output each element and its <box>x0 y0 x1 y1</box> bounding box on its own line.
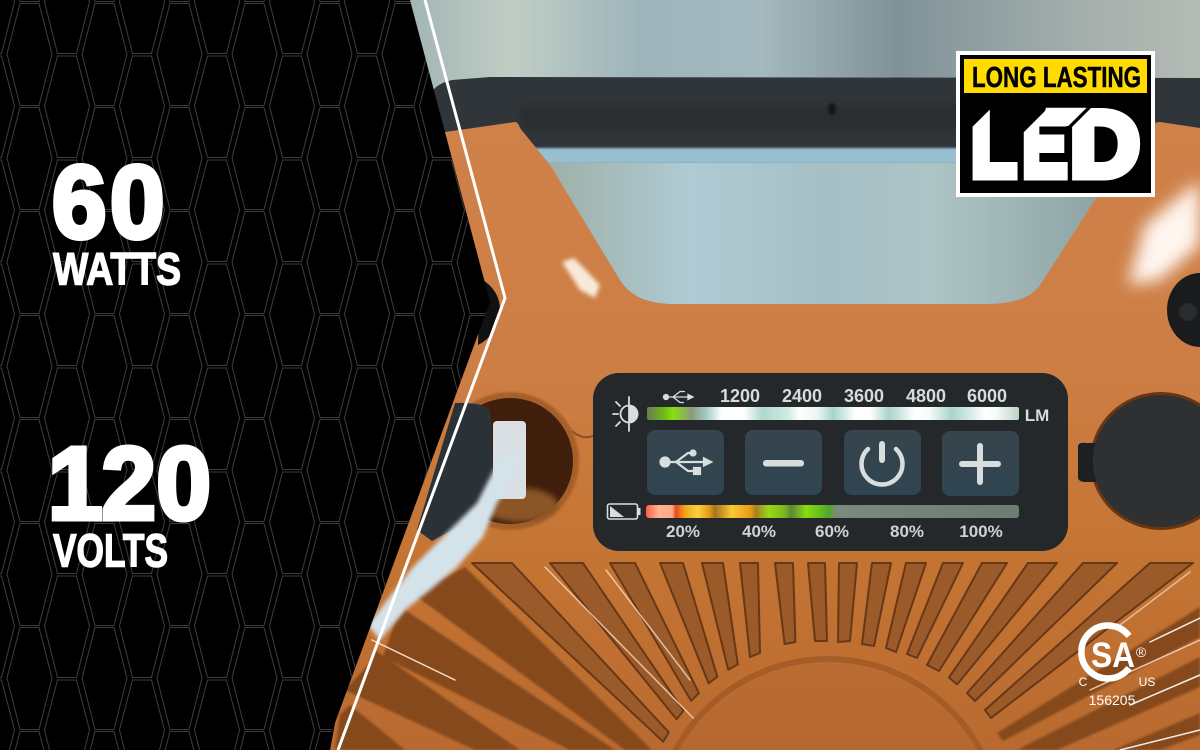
stat: 120 volts: 120 <box>48 427 211 542</box>
badge: long lasting LED <box>956 51 1155 197</box>
lumen light bar <box>647 407 1019 420</box>
hub <box>672 656 984 750</box>
left dark mount <box>478 278 500 345</box>
window opening <box>540 163 1110 310</box>
stat: 60 watts <box>52 145 181 294</box>
side knob <box>1167 273 1200 347</box>
photo: work light control panel <box>330 0 1200 750</box>
lumen scale labels <box>720 386 1049 425</box>
USB plug <box>493 421 526 499</box>
lumen scale labels: 1200 <box>720 386 760 406</box>
control panel <box>593 373 1068 551</box>
certification mark: CSA: SA <box>1091 636 1135 675</box>
button: plus <box>942 431 1019 496</box>
gloss highlights <box>562 180 1200 298</box>
fan grooves lower left <box>335 567 652 750</box>
battery percent labels: 40% <box>742 522 776 541</box>
certification mark: CSA: US <box>1139 675 1155 689</box>
lumen scale labels: 4800 <box>906 386 946 406</box>
battery percent labels <box>666 522 1003 541</box>
certification mark: CSA: 156205 <box>1089 692 1136 708</box>
certification mark: CSA <box>1079 626 1155 708</box>
panel: black hexagon-pattern sidebar <box>0 0 490 750</box>
button: power <box>844 430 921 495</box>
fan grooves lower right <box>997 607 1200 750</box>
stat: 120 volts: VOLTS <box>53 524 168 576</box>
white chevron divider line <box>338 0 505 750</box>
battery percent labels: 60% <box>815 522 849 541</box>
blurred background <box>380 0 1200 310</box>
handle: rubber grip <box>432 77 1200 170</box>
white cable <box>368 452 522 640</box>
battery percent labels: 20% <box>666 522 700 541</box>
battery percent labels: 80% <box>890 522 924 541</box>
panel background <box>593 373 1068 551</box>
right rubber cap <box>1078 392 1200 530</box>
fan slots <box>472 563 1193 742</box>
battery percent labels: 100% <box>959 522 1003 541</box>
lumen scale labels: 6000 <box>967 386 1007 406</box>
rib highlights <box>372 567 1200 750</box>
stat: 60 watts: WATTS <box>53 244 181 294</box>
icon: small USB <box>664 392 693 402</box>
badge: long lasting LED: LONG LASTING <box>972 62 1141 94</box>
icon: brightness <box>613 397 638 431</box>
port recess <box>441 392 593 530</box>
button: minus <box>745 430 822 495</box>
icon: battery <box>608 504 640 519</box>
lumen scale labels: 3600 <box>844 386 884 406</box>
LED wordmark <box>968 91 1140 196</box>
battery level bar <box>646 505 1019 518</box>
LED wordmark: L <box>971 91 1017 196</box>
button: USB <box>647 430 724 495</box>
LED wordmark: D <box>1070 91 1140 196</box>
dark plug body <box>417 403 492 541</box>
certification mark: CSA: C <box>1079 675 1088 689</box>
orange housing <box>330 122 1200 750</box>
stat: 60 watts: 60 <box>52 145 168 260</box>
certification mark: CSA: ® <box>1136 644 1147 660</box>
lumen scale labels: 2400 <box>782 386 822 406</box>
lumen scale labels: LM <box>1025 406 1049 425</box>
LED wordmark: E <box>1022 91 1067 196</box>
